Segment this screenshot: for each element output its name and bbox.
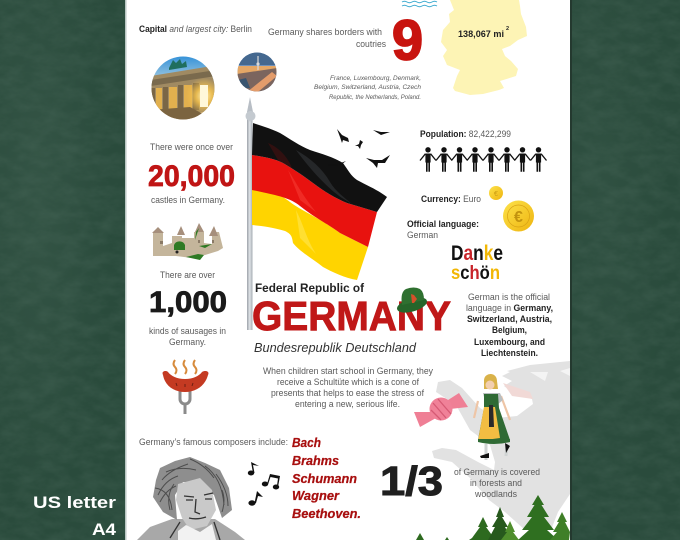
portrait: Beethoven xyxy=(137,457,245,540)
big number 9: 9 xyxy=(392,8,423,72)
official language countries: Switzerland, Austria, xyxy=(467,314,552,324)
Danke schön lettering: Danke xyxy=(451,242,503,265)
title block: GERMANY xyxy=(252,293,451,339)
icon: music notes xyxy=(248,462,280,506)
official language: German xyxy=(407,230,438,240)
composer names: Bach xyxy=(292,436,321,450)
Schultüte text: presents that helps to ease the stress of xyxy=(271,388,424,398)
Schultüte text: entering a new, serious life. xyxy=(295,399,400,409)
population: Population: 82,422,299 xyxy=(420,129,511,139)
neighbouring countries list: France, Luxembourg, Denmark, xyxy=(330,75,421,82)
official language: Official language: xyxy=(407,219,479,229)
icon: green hat xyxy=(395,288,429,316)
neighbouring countries list: Republic, the Netherlands, Poland. xyxy=(329,94,421,101)
forest fact: woodlands xyxy=(474,489,517,499)
left fact: sausages xyxy=(149,270,227,347)
map of Germany with area: 2 xyxy=(506,26,509,32)
icon: sausage on fork xyxy=(163,360,208,414)
format labels: US letter xyxy=(33,494,117,512)
forest fact: of Germany is covered xyxy=(454,467,540,477)
icon: row of people xyxy=(420,147,546,172)
borders text: coutries xyxy=(356,39,386,49)
official language countries: Liechtenstein. xyxy=(481,348,538,358)
currency: Currency: Euro xyxy=(421,194,481,204)
fir trees xyxy=(416,495,570,540)
title block: Federal Republic of xyxy=(255,281,365,295)
population xyxy=(420,129,546,172)
left fact: sausages: There are over xyxy=(160,270,215,280)
icon: coins xyxy=(489,186,534,232)
neighbouring countries list xyxy=(314,75,421,101)
composer names: Schumann xyxy=(292,472,357,486)
left fact: castles: castles in Germany. xyxy=(151,195,225,205)
currency xyxy=(421,186,534,232)
left fact: castles: There were once over xyxy=(150,142,233,152)
composer names: Brahms xyxy=(292,454,339,468)
composer names: Beethoven. xyxy=(292,507,361,521)
icon: coins: € xyxy=(514,209,523,226)
official language countries: German is the official xyxy=(468,292,550,302)
forest fact xyxy=(380,458,540,504)
official language countries: Luxembourg, and xyxy=(474,337,545,347)
left fact: sausages: 1,000 xyxy=(149,286,227,319)
title block xyxy=(252,281,451,355)
flagpole xyxy=(246,97,256,330)
composer names xyxy=(292,436,361,521)
official language countries: Belgium, xyxy=(492,325,527,335)
left fact: castles: 20,000 xyxy=(148,160,235,193)
icon: castle xyxy=(152,223,223,260)
forest fact: 1/3 xyxy=(380,458,443,504)
birds xyxy=(328,129,390,168)
composers xyxy=(139,436,361,521)
borders text: Germany shares borders with xyxy=(268,27,382,37)
icon: water waves xyxy=(402,1,437,7)
Danke schön lettering: schön xyxy=(451,263,500,284)
photo: Berlin skyline xyxy=(237,52,277,92)
composer names: Wagner xyxy=(292,489,340,503)
capital text: Capital and largest city: Berlin xyxy=(139,24,252,34)
girl in dirndl xyxy=(474,374,510,460)
official language countries xyxy=(466,292,553,358)
composers: Germany’s famous composers include: xyxy=(139,437,288,447)
candy xyxy=(414,393,468,427)
title block: Bundesrepublik Deutschland xyxy=(254,341,417,355)
borders text xyxy=(268,27,386,49)
left fact: sausages: Germany. xyxy=(169,337,206,347)
bear watermark xyxy=(432,361,570,530)
official language countries: language in Germany, xyxy=(466,303,553,313)
Danke schön lettering xyxy=(451,242,503,284)
left fact: castles xyxy=(148,142,235,205)
photo: Brandenburg Gate xyxy=(152,56,214,120)
format labels: A4 xyxy=(92,521,117,539)
forest fact: in forests and xyxy=(470,478,522,488)
left fact: sausages: kinds of sausages in xyxy=(149,326,226,336)
Schultüte text: When children start school in Germany, they xyxy=(263,366,433,376)
neighbouring countries list: Belgium, Switzerland, Austria, Czech xyxy=(314,84,421,91)
white poster sheet xyxy=(125,0,570,540)
format labels xyxy=(33,494,117,539)
Schultüte text: receive a Schultüte which is a cone of xyxy=(277,377,419,387)
official language xyxy=(407,219,479,240)
map of Germany with area xyxy=(441,0,527,95)
German flag xyxy=(252,123,387,280)
icon: coins: € xyxy=(494,191,498,198)
map of Germany with area: 138,067 mi xyxy=(458,29,504,40)
Schultüte text xyxy=(263,366,433,409)
